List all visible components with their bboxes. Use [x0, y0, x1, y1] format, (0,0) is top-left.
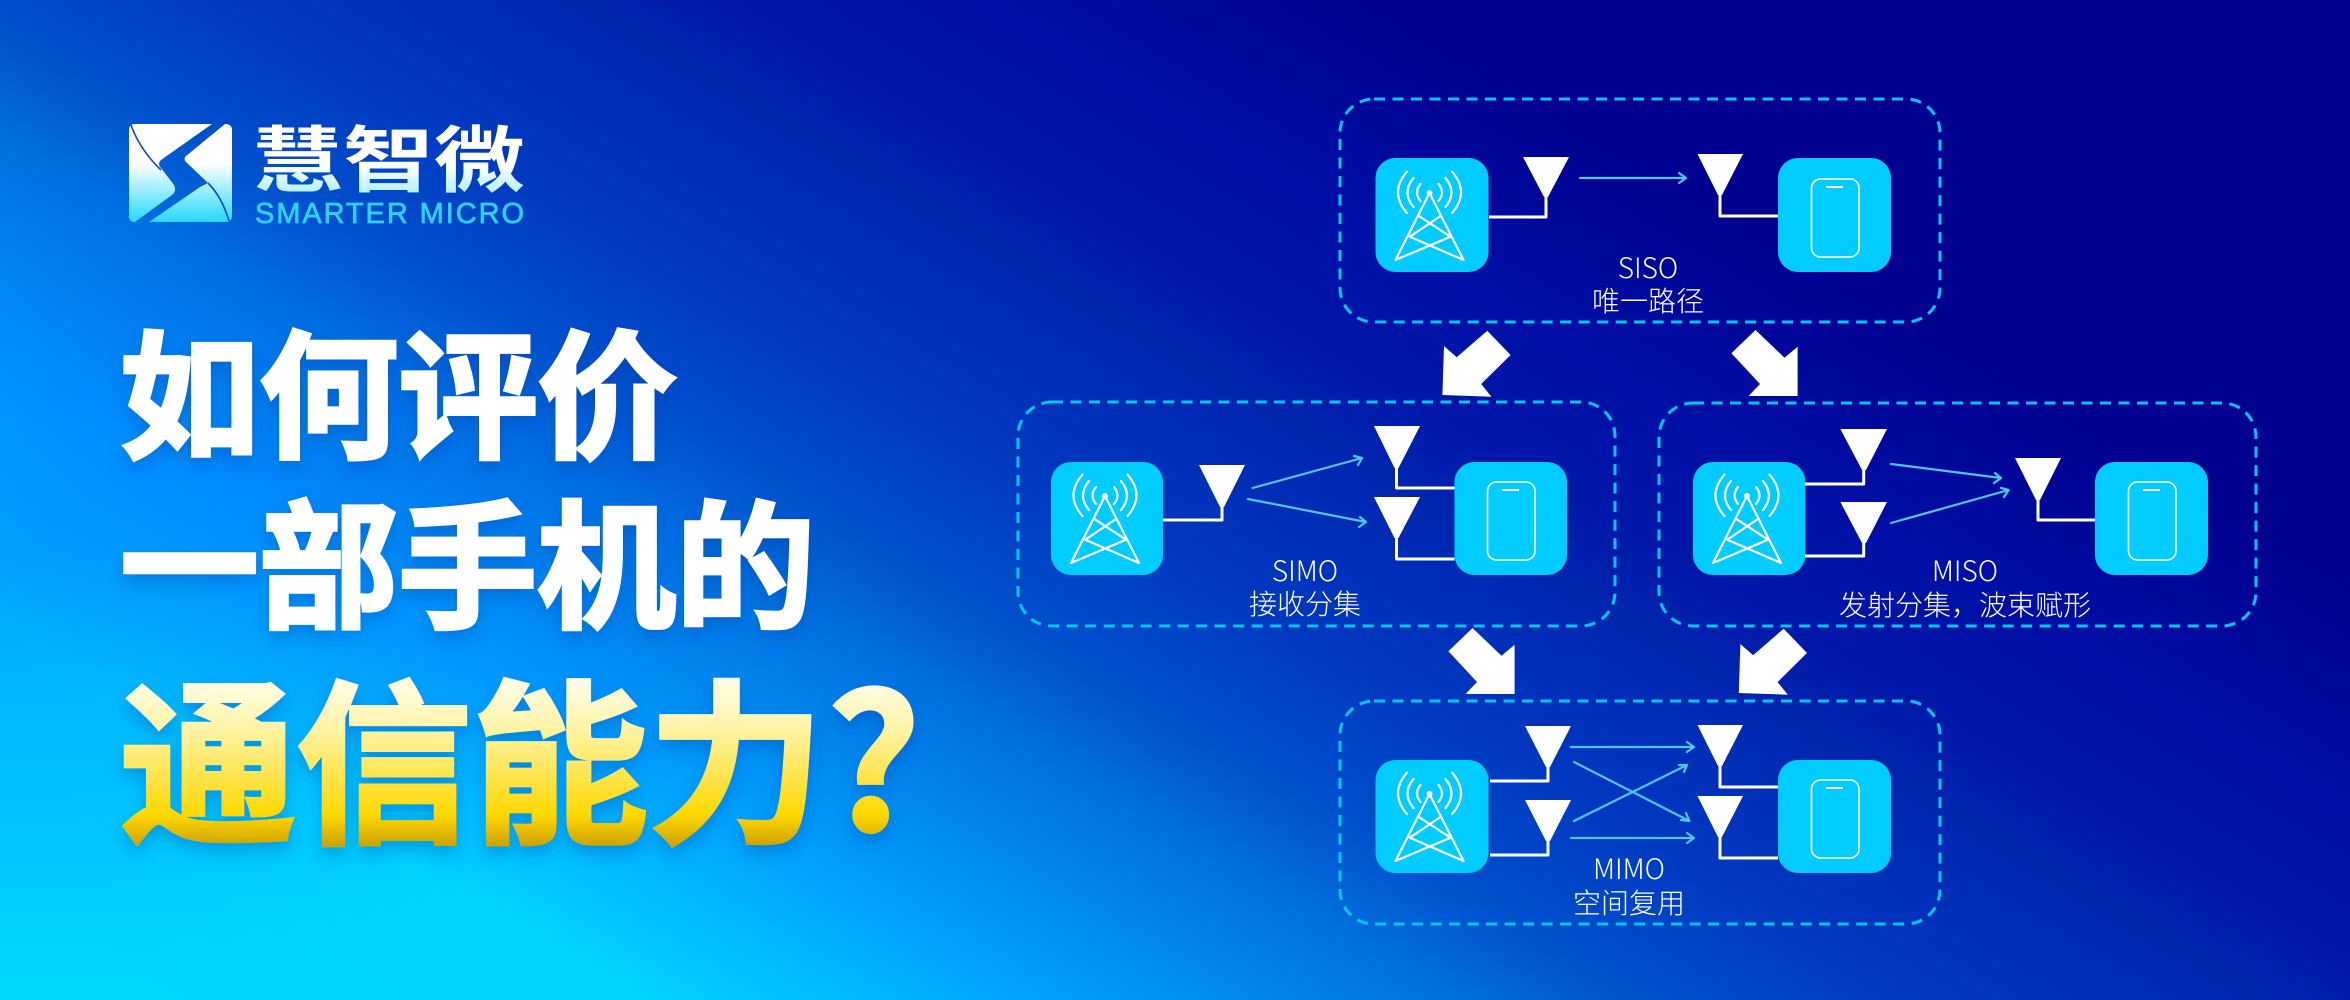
- antenna: transmit 1: [1805, 429, 1887, 484]
- title line 2: 一部手机的: [120, 457, 815, 657]
- label: 接收分集: [1249, 583, 1361, 623]
- panel: MIMO: [1340, 701, 1940, 924]
- signal arrows: [1891, 464, 2009, 523]
- logo english name: SMARTER MICRO: [255, 198, 524, 230]
- logo mark: [129, 124, 232, 222]
- signal arrows: [1248, 456, 1366, 527]
- title: [120, 287, 921, 884]
- icon: phone: [1454, 462, 1567, 575]
- antenna: transmit 2: [1490, 800, 1571, 855]
- logo chinese name: 慧智微: [252, 102, 525, 207]
- icon: phone: [1778, 158, 1891, 272]
- label: 空间复用: [1573, 882, 1685, 922]
- title line 3 highlighted: 通信能力: [120, 625, 824, 880]
- panel: SISO: [1340, 99, 1940, 322]
- antenna: transmit: [1489, 157, 1569, 217]
- arrow: MISO to MIMO: [1739, 629, 1807, 695]
- label: SISO: [1618, 247, 1678, 287]
- icon: base station: [1376, 158, 1488, 272]
- antenna: receive 2: [1698, 796, 1778, 858]
- label: 唯一路径: [1592, 280, 1704, 320]
- antenna: transmit 1: [1490, 726, 1571, 781]
- arrow: SISO to MISO: [1731, 330, 1798, 396]
- label: SIMO: [1272, 550, 1338, 590]
- icon: base station: [1693, 462, 1806, 575]
- title question mark: ?: [826, 616, 921, 884]
- antenna: receive: [1698, 154, 1778, 216]
- icon: phone: [1778, 760, 1891, 873]
- antenna: transmit 2: [1805, 502, 1887, 556]
- antenna: receive 1: [1374, 426, 1454, 488]
- logo: Smarter Micro: [129, 102, 525, 230]
- arrow: SISO to SIMO: [1442, 331, 1511, 397]
- antenna: receive: [2015, 458, 2095, 520]
- panel: SIMO: [1018, 402, 1615, 626]
- signal arrow: [1580, 173, 1686, 183]
- antenna: receive 1: [1698, 725, 1778, 787]
- label: 发射分集，波束赋形: [1839, 584, 2091, 624]
- signal arrows: [1571, 742, 1694, 843]
- panel: MISO: [1659, 403, 2256, 626]
- title line 1: 如何评价: [120, 287, 677, 487]
- antenna: receive 2: [1374, 497, 1454, 559]
- icon: phone: [2095, 462, 2208, 575]
- label: MIMO: [1593, 848, 1665, 888]
- label: MISO: [1932, 550, 1998, 590]
- arrow: SIMO to MIMO: [1448, 628, 1515, 694]
- icon: base station: [1376, 760, 1488, 873]
- antenna: transmit: [1163, 465, 1245, 520]
- icon: base station: [1051, 462, 1163, 575]
